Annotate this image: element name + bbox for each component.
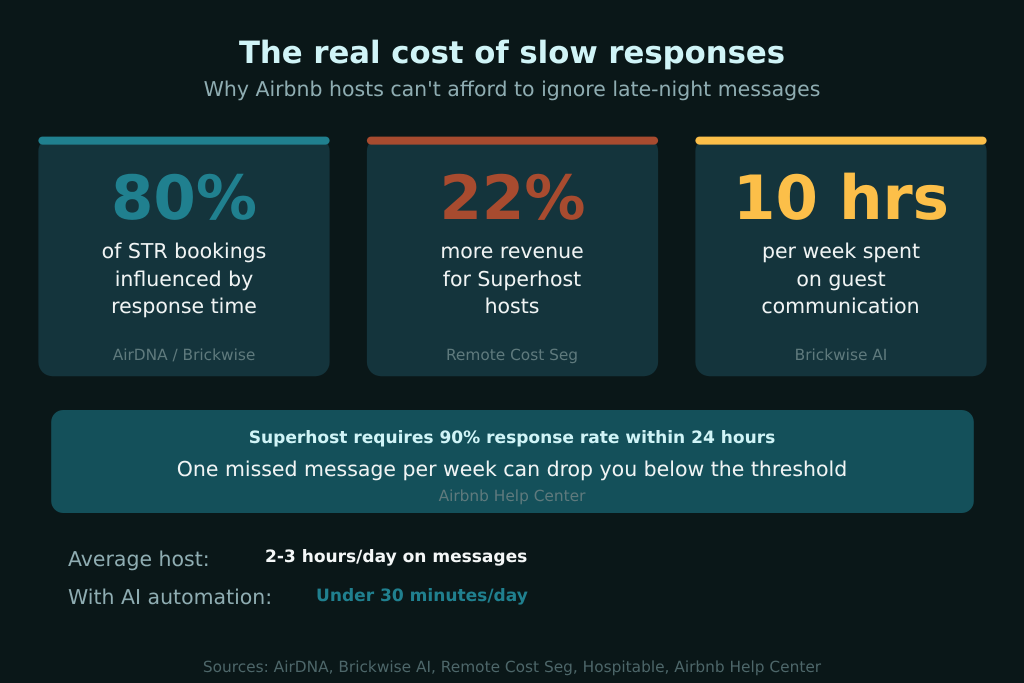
callout source: Airbnb Help Center	[439, 487, 586, 505]
accent bar: teal	[38, 137, 330, 145]
label: with AI: With AI automation:	[68, 585, 272, 609]
stat: 80%: 80%	[111, 163, 257, 234]
subtitle: Why Airbnb hosts can't afford to ignore late-night messages	[204, 77, 820, 101]
footer sources: Sources: AirDNA, Brickwise AI, Remote Cost Seg, Hospitable, Airbnb Help Center	[203, 658, 822, 676]
stat: 10 hrs: 10 hrs	[733, 163, 949, 234]
label: average host: Average host:	[68, 547, 210, 571]
callout heading: Superhost requires 90% response rate within 24 hours	[249, 428, 775, 448]
panel: 80% stat	[38, 137, 330, 376]
panel: 22% stat	[367, 137, 658, 376]
accent bar: yellow	[695, 137, 987, 145]
description: communication: per week spent	[762, 239, 920, 263]
stat: 22%: 22%	[439, 163, 586, 234]
description: bookings: of STR bookings	[102, 239, 266, 263]
panel: 10 hrs stat: communication	[761, 294, 920, 318]
panel: 10 hrs stat	[695, 137, 987, 376]
source: Brickwise AI: Brickwise AI	[795, 346, 887, 364]
source: AirDNA / Brickwise: AirDNA / Brickwise	[113, 346, 255, 364]
value: under 30 minutes: Under 30 minutes/day	[316, 586, 528, 606]
panel: 10 hrs stat: on guest	[796, 267, 886, 291]
value: hours per day: 2-3 hours/day on messages	[265, 547, 527, 567]
description: revenue: more revenue	[440, 239, 584, 263]
source: Remote Cost Seg: Remote Cost Seg	[446, 346, 578, 364]
callout: Superhost threshold	[51, 410, 974, 513]
panel: 80% stat: influenced by	[115, 267, 253, 291]
callout body: One missed message per week can drop you below the threshold	[177, 457, 847, 481]
panel: 80% stat: response time	[111, 294, 257, 318]
panel: 22% stat: for Superhost	[443, 267, 581, 291]
comparison: average host	[68, 547, 527, 571]
title: The real cost of slow responses	[239, 35, 785, 71]
comparison: with AI automation	[68, 585, 528, 609]
panel: 22% stat: hosts	[485, 294, 539, 318]
accent bar: rust	[367, 137, 658, 145]
